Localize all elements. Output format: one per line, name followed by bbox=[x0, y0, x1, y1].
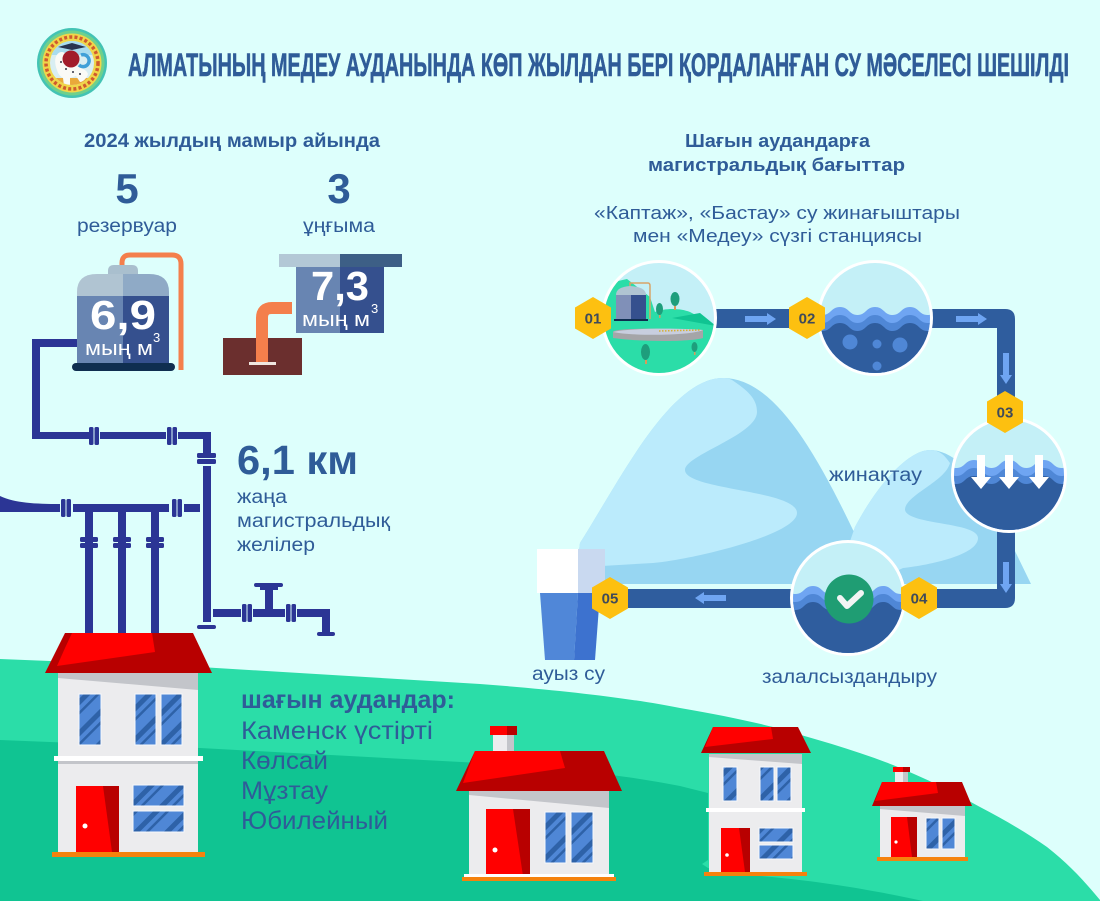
heading: routes to microdistricts: магистральдық бағыттар bbox=[648, 154, 905, 175]
hexagon badge 02: 02 bbox=[799, 310, 815, 328]
stat: 6,1 km new mains: желілер bbox=[237, 535, 315, 556]
stat: 5 reservoirs: 5 bbox=[115, 165, 139, 212]
mountains bbox=[575, 378, 1031, 584]
icon: well 7,3: 3 bbox=[371, 301, 378, 316]
stat: 3 wells bbox=[303, 165, 375, 237]
step 01: reservoir landscape bbox=[600, 260, 720, 380]
stat: 6,1 km new mains bbox=[237, 437, 391, 556]
heading: routes to microdistricts bbox=[648, 130, 905, 175]
label: disinfection: залалсыздандыру bbox=[762, 667, 938, 688]
step 03: water accumulation bbox=[951, 418, 1067, 533]
icon: well 7,3: мың м bbox=[302, 309, 370, 331]
icon: glass of water bbox=[537, 549, 605, 660]
green hills bbox=[0, 659, 1100, 901]
label: accumulation: жинақтау bbox=[829, 465, 923, 486]
logo: Almaty emblem bbox=[37, 28, 107, 98]
step 04: disinfection bbox=[790, 540, 904, 656]
stat: 6,1 km new mains: магистральдық bbox=[237, 511, 391, 532]
icon: reservoir tank 6,9 bbox=[72, 255, 181, 371]
hexagon badge 04: 04 bbox=[911, 590, 928, 608]
icon: reservoir tank 6,9: 6,9 bbox=[90, 292, 156, 338]
hexagon badge 04 bbox=[901, 577, 937, 619]
hexagon badge 01: 01 bbox=[585, 310, 601, 328]
icon: reservoir tank 6,9: мың м bbox=[85, 338, 153, 360]
hexagon badge 05: 05 bbox=[602, 590, 618, 608]
stat: 3 wells: 3 bbox=[327, 165, 351, 212]
list: microdistricts: Көлсай bbox=[241, 747, 328, 775]
icon: well 7,3 bbox=[223, 254, 402, 375]
hexagon badge 03: 03 bbox=[997, 404, 1013, 422]
hexagon badge 05 bbox=[592, 577, 628, 619]
hexagon badge 01 bbox=[575, 297, 611, 339]
text: water sources: «Каптаж», «Бастау» су жинағыштары bbox=[594, 202, 960, 223]
house 3: medium two-storey bbox=[701, 727, 811, 876]
pipeline network bbox=[0, 339, 335, 636]
stat: 6,1 km new mains: жаңа bbox=[237, 487, 287, 508]
hexagon badge 02 bbox=[789, 297, 825, 339]
icon: well 7,3: 7,3 bbox=[311, 263, 369, 309]
stat: 5 reservoirs: резервуар bbox=[77, 216, 177, 237]
stat: 3 wells: ұңғыма bbox=[303, 216, 375, 237]
list: microdistricts: Каменск үстірті bbox=[241, 717, 433, 745]
text: water sources: мен «Медеу» сүзгі станциясы bbox=[633, 225, 922, 246]
hexagon badge 03 bbox=[987, 391, 1023, 433]
house 2: wide one-storey bbox=[456, 726, 622, 881]
house 4: small one-storey bbox=[872, 767, 972, 861]
process pipe with arrows bbox=[610, 309, 1015, 608]
list: microdistricts bbox=[241, 686, 455, 835]
heading: May 2024: 2024 жылдың мамыр айында bbox=[84, 131, 380, 152]
heading: routes to microdistricts: Шағын аудандарға bbox=[685, 130, 871, 151]
text: water sources bbox=[594, 202, 960, 246]
list: microdistricts: Юбилейный bbox=[241, 807, 388, 835]
list: microdistricts: Мұзтау bbox=[241, 777, 329, 805]
stat: 5 reservoirs bbox=[77, 165, 177, 237]
label: drinking water: ауыз су bbox=[532, 664, 606, 685]
step 02: water with sediment bbox=[819, 260, 933, 376]
stat: 6,1 km new mains: 6,1 км bbox=[237, 437, 358, 483]
house 1: large two-storey bbox=[45, 633, 212, 857]
icon: reservoir tank 6,9: 3 bbox=[153, 330, 160, 345]
list: microdistricts: шағын аудандар: bbox=[241, 686, 455, 714]
